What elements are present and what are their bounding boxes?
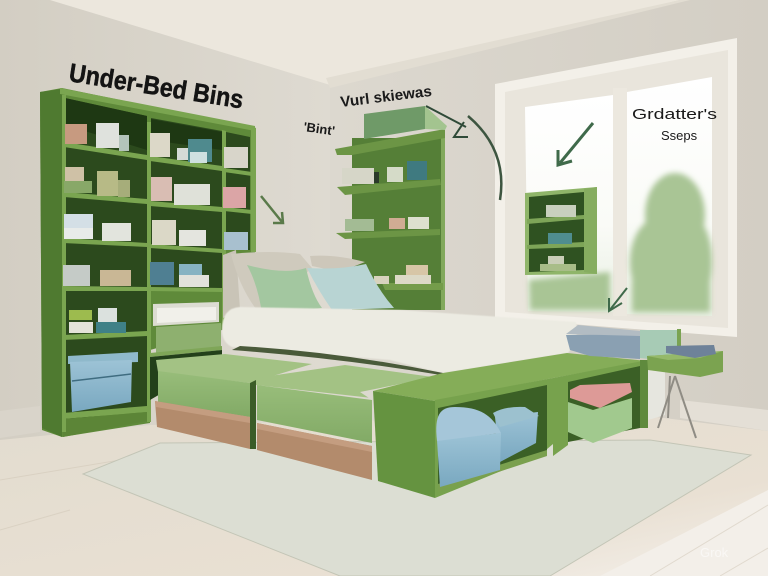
arrow: window lower (609, 288, 627, 311)
pillow: green (247, 265, 322, 314)
top shelf box (364, 106, 425, 139)
under-bed bin left: green over tan (155, 354, 312, 449)
blue bin front (436, 407, 501, 487)
white and green drawers on bookcase (150, 302, 222, 400)
shelves column 3 (224, 168, 252, 176)
mattress (222, 307, 577, 373)
top bins on bench (566, 325, 681, 362)
window with tree view (495, 38, 737, 337)
label: Grdatter's Sseps: Sseps (661, 128, 698, 143)
shelves column 1 (60, 88, 256, 437)
bench top (373, 353, 647, 401)
blue bin back (493, 407, 539, 462)
arrow: to bed from bookcase (261, 196, 283, 223)
blue bin on bookcase (68, 352, 138, 412)
stored items on bookcase (63, 123, 248, 333)
title: Under-Bed Bins: Under-Bed Bins (67, 57, 246, 114)
under-bed bin centre: green over tan (256, 365, 440, 480)
bench right section (553, 360, 648, 456)
pillow: pale blue (307, 264, 394, 310)
items on shelf unit (342, 161, 431, 284)
arrow: curved (468, 116, 501, 200)
arrow: window down-left (558, 123, 593, 165)
tall bookcase on left wall (40, 88, 256, 437)
rug (83, 440, 751, 576)
pink bin (568, 383, 632, 443)
label: Grdatter's Sseps (632, 106, 717, 143)
side table (647, 345, 723, 438)
bench storage unit (373, 353, 648, 498)
wall shelf unit behind bed (335, 106, 447, 310)
label: Grdatter's Sseps: Grdatter's (632, 106, 717, 123)
label: Vurl skiewas: Vurl skiewas (339, 83, 433, 111)
label: Bint: 'Bint' (303, 119, 336, 138)
headboard and pillows (223, 250, 394, 318)
window wall shelf (525, 187, 597, 275)
shelves column 2 (150, 156, 222, 171)
watermark: Grok (700, 545, 729, 560)
arrow: to top shelf box (426, 106, 468, 137)
bench left panel (373, 391, 435, 498)
